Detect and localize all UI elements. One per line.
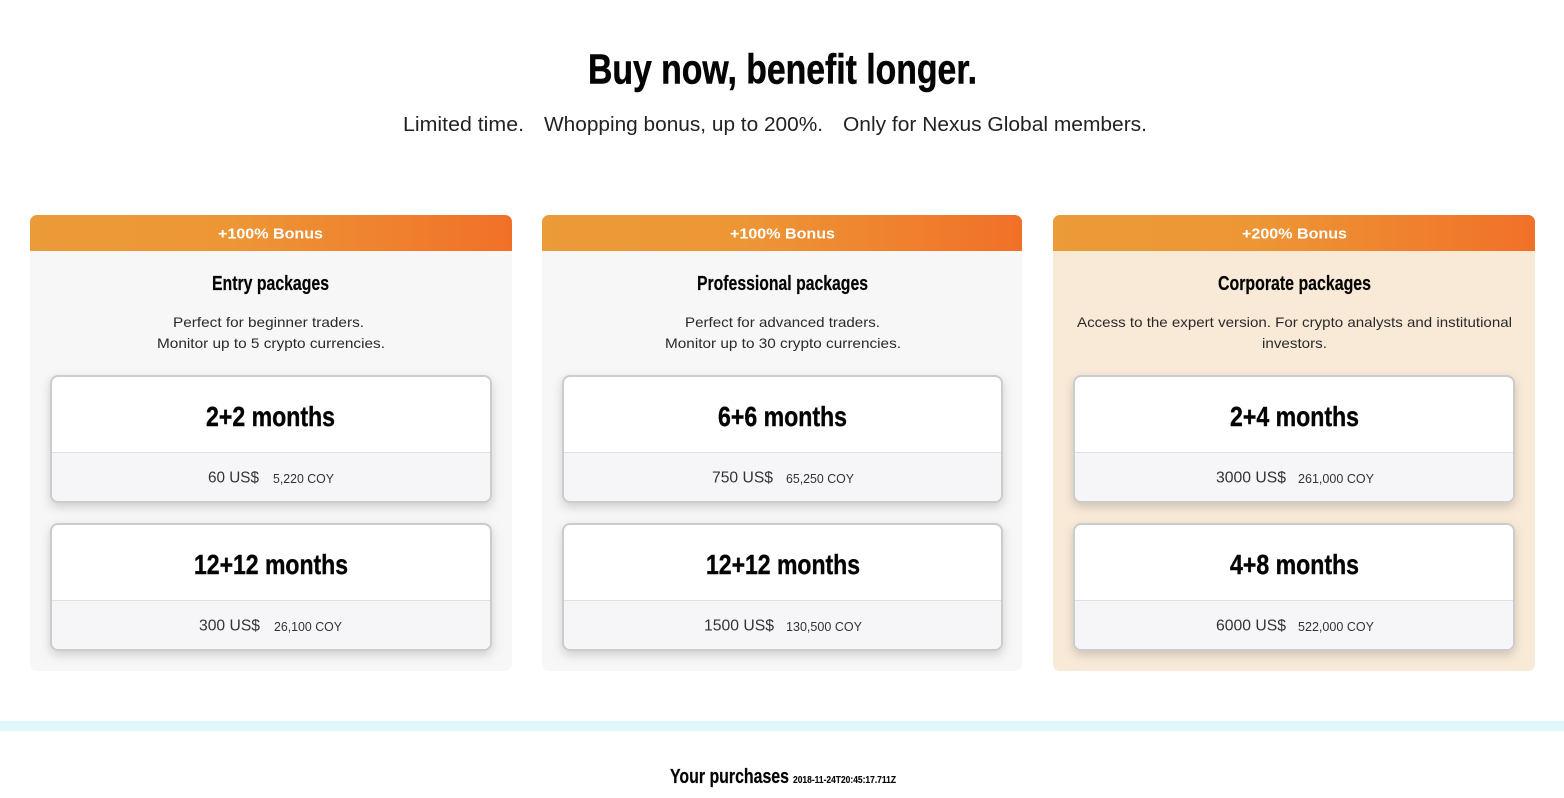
- panel: corporate packages: [1053, 215, 1535, 671]
- package card: 2+4 months: [1074, 376, 1514, 502]
- package card: 2+4 months: 2+4 months: [1230, 401, 1359, 432]
- heading: professional packages: Professional packages: [697, 273, 868, 295]
- description: professional: Perfect for advanced traders.: [685, 314, 880, 330]
- description: professional: Monitor up to 30 crypto currencies.: [665, 335, 901, 351]
- description: corporate: investors.: [1262, 335, 1327, 351]
- package card: 12+12 months: 26,100 COY: [274, 619, 342, 634]
- package card: 6+6 months: 750 US$: [712, 470, 773, 486]
- package card: 12+12 months: [563, 524, 1002, 650]
- package card: 2+2 months: 5,220 COY: [273, 471, 334, 486]
- description: entry: [157, 314, 385, 351]
- heading: your purchases: 2018-11-24T20:45:17.711Z: [793, 775, 896, 786]
- bonus banner: corporate: +200% Bonus: [1242, 226, 1347, 242]
- package card: 6+6 months: 6+6 months: [718, 401, 847, 432]
- subtitle: Limited time.: [403, 114, 524, 136]
- package card: 12+12 months: 12+12 months: [706, 549, 860, 580]
- package card: 12+12 months: 1500 US$: [704, 618, 774, 634]
- bonus banner: entry: [30, 215, 512, 251]
- bonus banner: professional: +100% Bonus: [730, 226, 835, 242]
- heading: your purchases: [670, 766, 896, 788]
- heading: entry packages: Entry packages: [212, 273, 329, 295]
- package card: 4+8 months: 4+8 months: [1230, 549, 1359, 580]
- description: entry: Monitor up to 5 crypto currencies.: [157, 335, 385, 351]
- panel: entry packages: [30, 215, 512, 671]
- description: entry: Perfect for beginner traders.: [173, 314, 364, 330]
- description: professional: [665, 314, 901, 351]
- subtitle: Whopping bonus, up to 200%.: [544, 114, 823, 136]
- package card: 6+6 months: [563, 376, 1002, 502]
- package card: 2+4 months: 3000 US$: [1216, 470, 1286, 486]
- package card: 2+2 months: 60 US$: [208, 470, 259, 486]
- heading: your purchases: Your purchases: [670, 766, 789, 788]
- package card: 2+2 months: 2+2 months: [206, 401, 335, 432]
- title: Buy now, benefit longer.: [588, 46, 977, 92]
- package card: 6+6 months: 65,250 COY: [786, 471, 854, 486]
- heading: corporate packages: Corporate packages: [1218, 273, 1371, 295]
- package card: 4+8 months: 6000 US$: [1216, 618, 1286, 634]
- bonus banner: corporate: [1053, 215, 1535, 251]
- bonus banner: entry: +100% Bonus: [218, 226, 323, 242]
- package card: 12+12 months: 130,500 COY: [786, 619, 862, 634]
- package card: 12+12 months: [51, 524, 491, 650]
- description: corporate: Access to the expert version. For crypto analysts and institutional: [1077, 314, 1512, 330]
- package card: 2+4 months: 261,000 COY: [1298, 471, 1374, 486]
- description: corporate: [1077, 314, 1512, 351]
- subtitle: Only for Nexus Global members.: [843, 114, 1147, 136]
- package card: 4+8 months: [1074, 524, 1514, 650]
- package card: 12+12 months: 12+12 months: [194, 549, 348, 580]
- package card: 12+12 months: 300 US$: [199, 618, 260, 634]
- bonus banner: professional: [542, 215, 1022, 251]
- package card: 4+8 months: 522,000 COY: [1298, 619, 1374, 634]
- subtitle: [403, 114, 1147, 136]
- panel: professional packages: [542, 215, 1022, 671]
- package card: 2+2 months: [51, 376, 491, 502]
